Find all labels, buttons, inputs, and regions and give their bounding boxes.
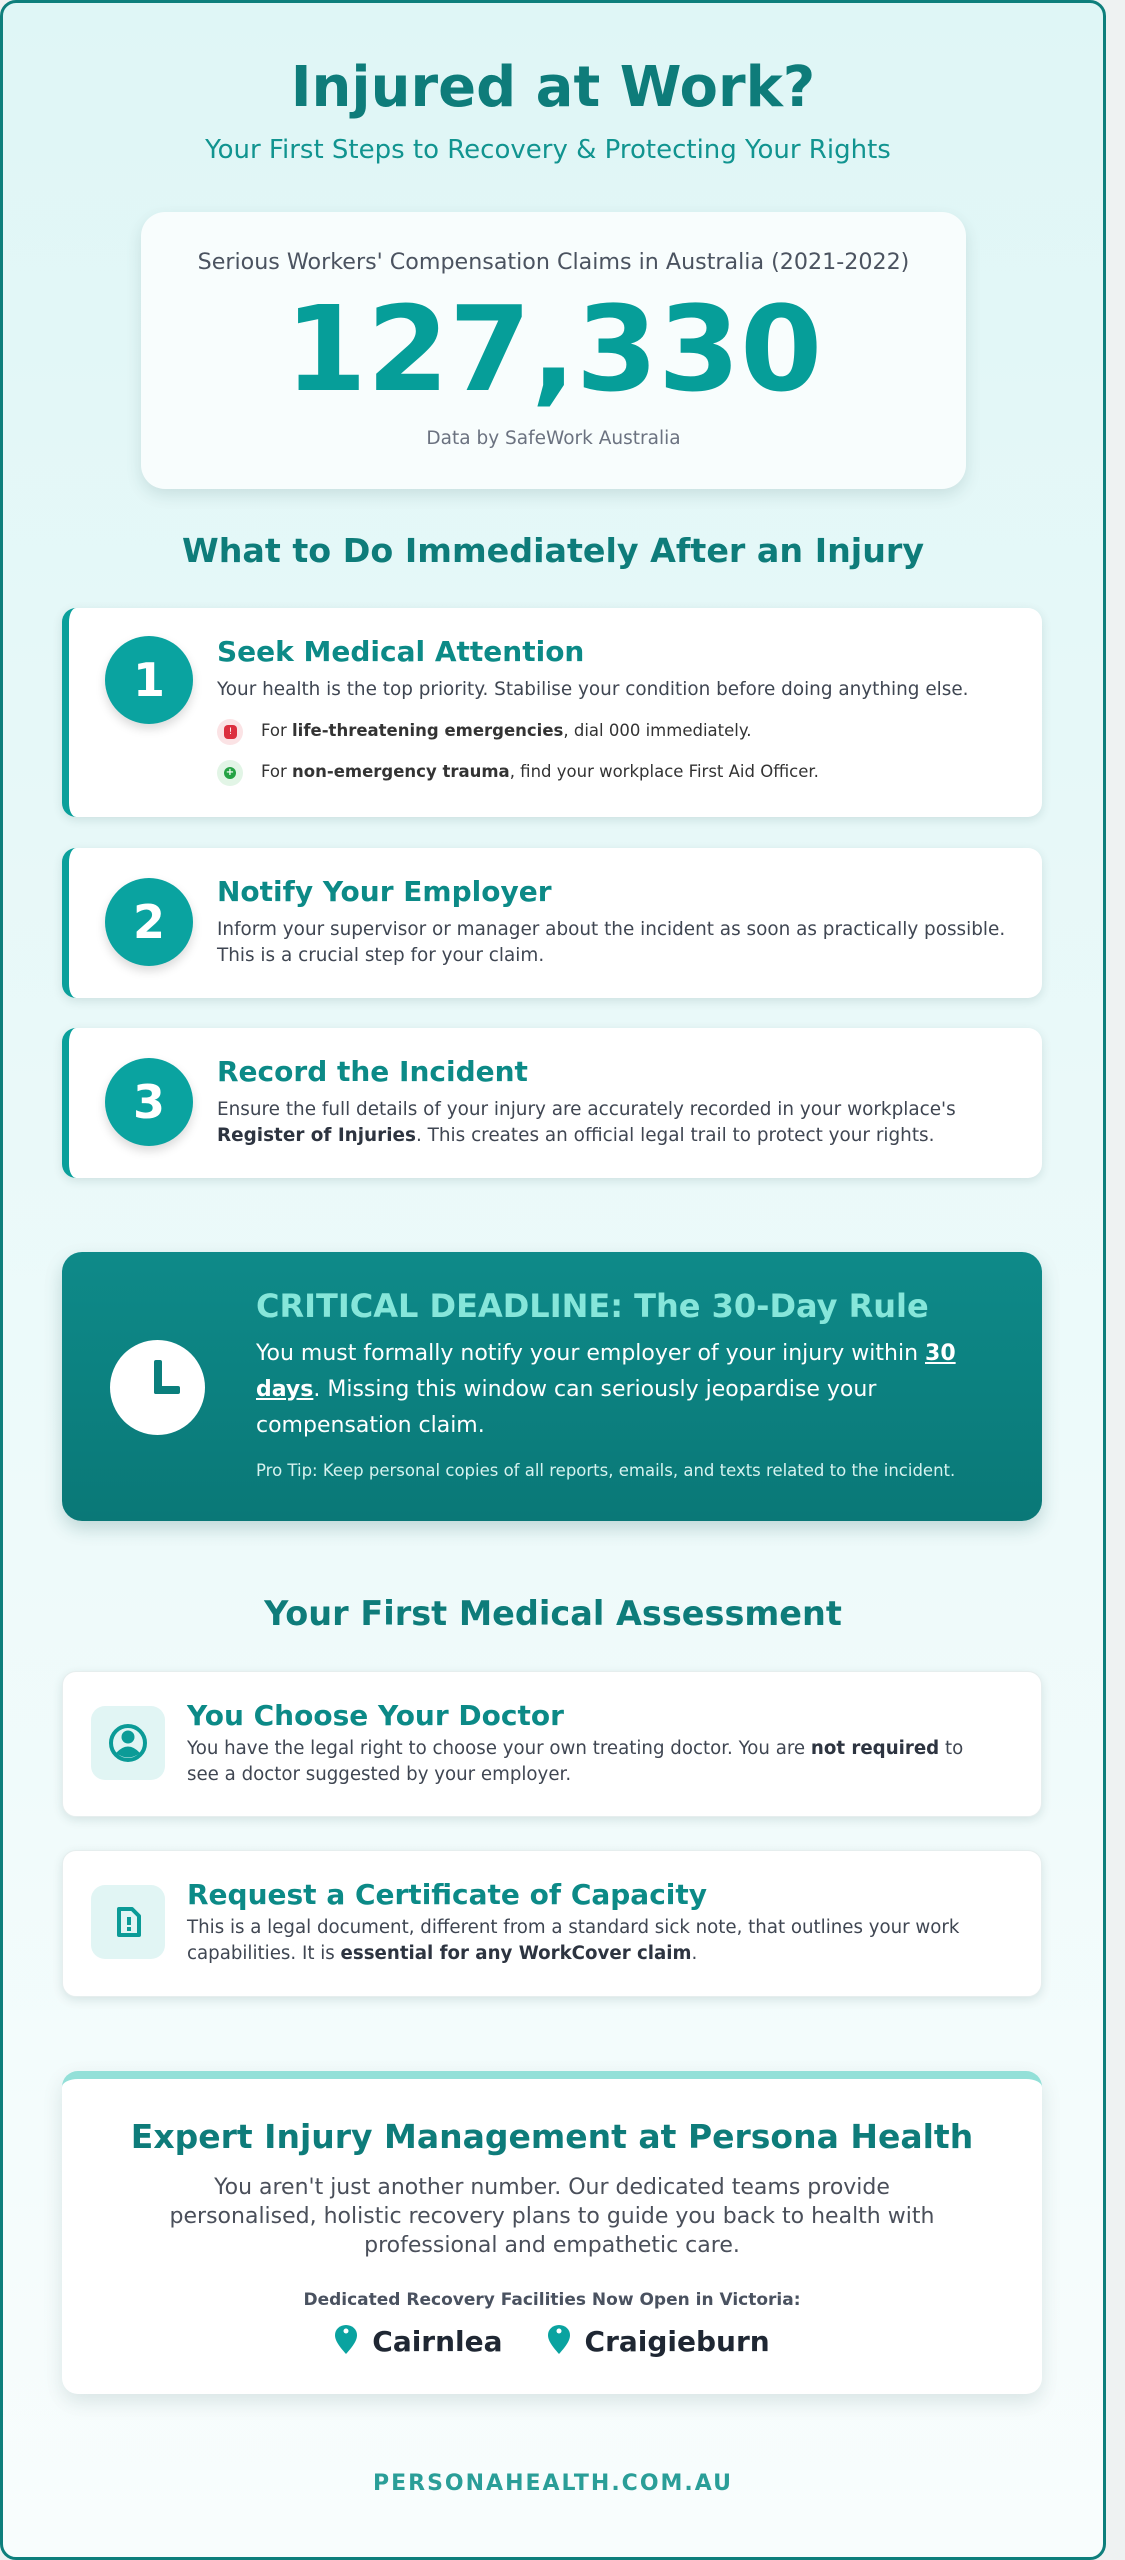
bullet: emergency xyxy=(217,719,752,745)
step 3 number xyxy=(105,1058,193,1146)
location: Craigieburn xyxy=(372,2325,770,2358)
deadline callout xyxy=(62,1252,1042,1521)
certificate title: Request a Certificate of Capacity xyxy=(187,1878,707,1911)
subtitle: Your First Steps to Recovery & Protecting Your Rights xyxy=(205,135,891,165)
step 1 number xyxy=(105,636,193,724)
step 2 card xyxy=(62,848,1042,998)
step 2 text: Inform your supervisor or manager about the incident as soon as practically possible. This is a crucial step for your claim. xyxy=(217,919,1005,966)
bullet: first aid: For non-emergency trauma, find your workplace First Aid Officer. xyxy=(261,762,819,781)
doctor text: You have the legal right to choose your own treating doctor. You are not required to see a doctor suggested by your employer. xyxy=(187,1738,963,1785)
card: certificate xyxy=(62,1850,1042,1997)
icon: green plus: + xyxy=(226,766,234,778)
heading: immediate steps: What to Do Immediately After an Injury xyxy=(182,531,924,570)
persona text: You aren't just another number. Our dedicated teams provide personalised, holistic recovery plans to guide you back to health with professional and empathetic care. xyxy=(170,2175,934,2258)
persona title: Expert Injury Management at Persona Health xyxy=(131,2117,973,2156)
step 2 number xyxy=(105,878,193,966)
stat number: 127,330 xyxy=(285,280,822,418)
certificate text: This is a legal document, different from a standard sick note, that outlines your work capabilities. It is essential for any WorkCover claim. xyxy=(187,1917,959,1964)
stat source: Data by SafeWork Australia xyxy=(426,428,681,449)
step 3 text: Ensure the full details of your injury are accurately recorded in your workplace's Register of Injuries. This creates an official legal trail to protect your rights. xyxy=(217,1099,956,1146)
step 1 number: 1 xyxy=(133,653,165,707)
icon: user xyxy=(91,1706,165,1780)
icon: green plus xyxy=(217,760,243,786)
card: choose doctor xyxy=(62,1671,1042,1817)
title: Injured at Work? xyxy=(291,55,815,120)
deadline text: You must formally notify your employer of your injury within 30 days. Missing this window can seriously jeopardise your compensation claim. xyxy=(256,1341,956,1438)
footer url: PERSONAHEALTH.COM.AU xyxy=(373,2471,733,2496)
pro tip: Pro Tip: Keep personal copies of all reports, emails, and texts related to the incident. xyxy=(256,1461,955,1480)
icon: red alert: ! xyxy=(229,726,232,736)
step 1 title: Seek Medical Attention xyxy=(217,635,584,668)
locations: Cairnlea Craigieburn xyxy=(372,2325,770,2358)
step 3 title: Record the Incident xyxy=(217,1055,528,1088)
deadline title: CRITICAL DEADLINE: The 30-Day Rule xyxy=(256,1287,929,1325)
step 1 card xyxy=(62,608,1042,817)
icon: red alert xyxy=(217,718,243,744)
step 3 card xyxy=(62,1028,1042,1178)
doctor title: You Choose Your Doctor xyxy=(187,1699,564,1732)
bullet: first aid xyxy=(217,760,819,786)
location: Cairnlea xyxy=(335,2325,770,2358)
stat label: Serious Workers' Compensation Claims in Australia (2021-2022) xyxy=(198,249,909,275)
persona health card xyxy=(62,2071,1042,2394)
stat card xyxy=(141,212,966,489)
icon: clock xyxy=(110,1340,205,1435)
step 2 title: Notify Your Employer xyxy=(217,875,552,908)
heading: medical assessment: Your First Medical Assessment xyxy=(264,1594,842,1633)
icon: document xyxy=(91,1885,165,1959)
bullet: emergency: For life-threatening emergencies, dial 000 immediately. xyxy=(261,721,752,740)
step 1 text: Your health is the top priority. Stabilise your condition before doing anything else. xyxy=(217,679,968,700)
facilities label: Dedicated Recovery Facilities Now Open in Victoria: xyxy=(303,2290,801,2310)
step 2 number: 2 xyxy=(133,895,165,949)
step 3 number: 3 xyxy=(133,1075,165,1129)
